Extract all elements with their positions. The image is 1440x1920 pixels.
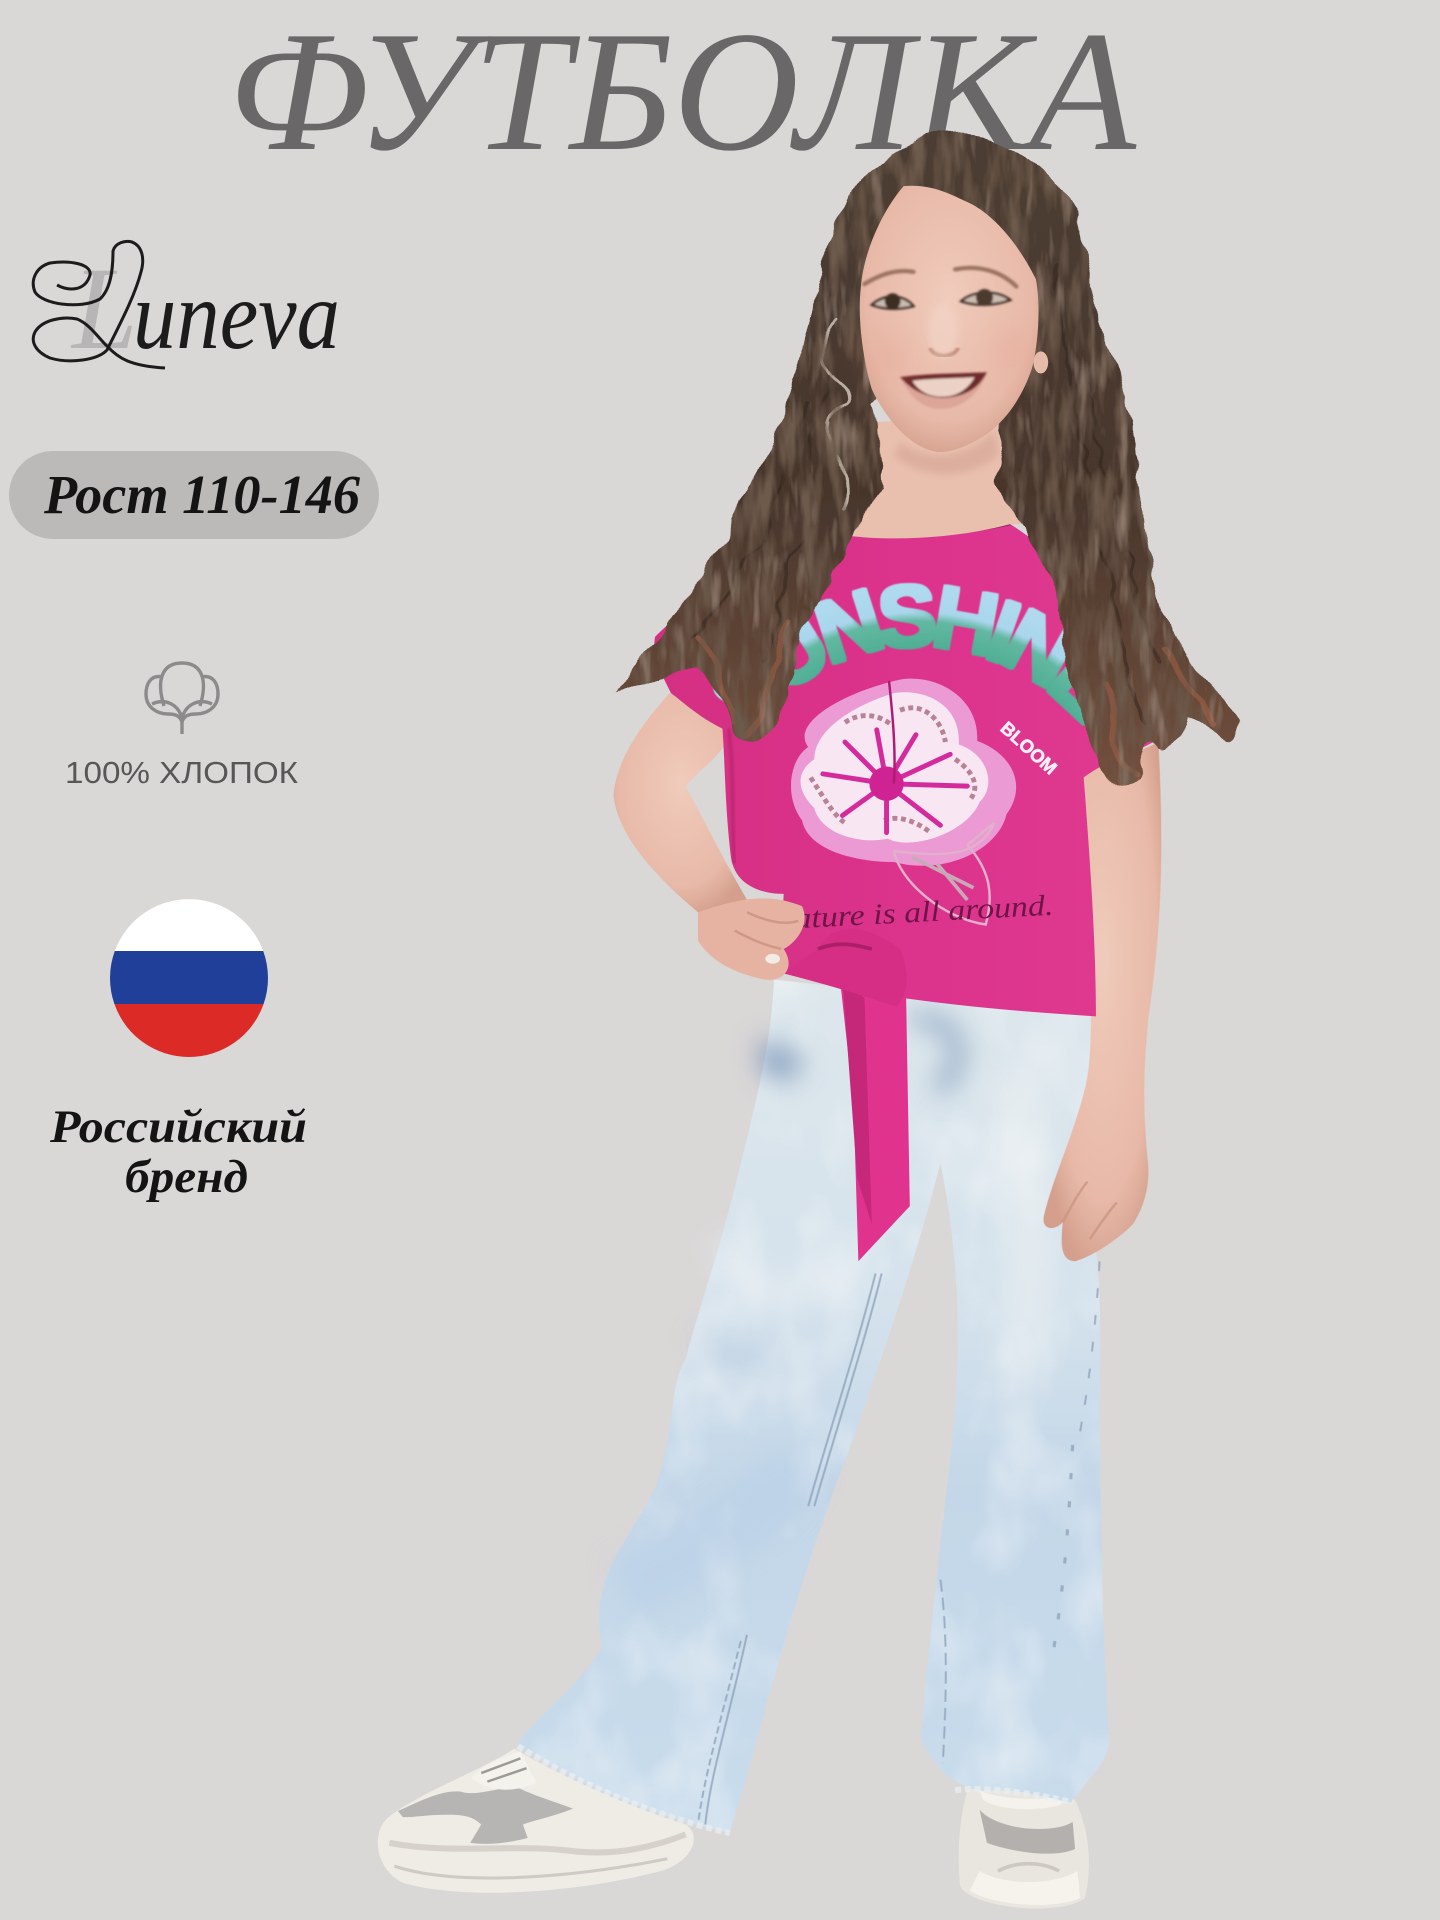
icon: cotton bbox=[146, 663, 218, 734]
brows bbox=[864, 268, 1016, 287]
print: BLOOM: BLOOM bbox=[997, 717, 1061, 778]
mouth bbox=[900, 372, 987, 409]
print: leaf bbox=[894, 823, 994, 924]
print: hibiscus flower bbox=[791, 679, 1016, 866]
brand text bbox=[49, 1101, 307, 1203]
brand text: бренд bbox=[125, 1151, 248, 1203]
neck shadow bbox=[894, 431, 998, 474]
hair strands bbox=[692, 269, 1212, 778]
face bbox=[860, 186, 1048, 474]
jeans bbox=[517, 980, 1109, 1833]
icon: Russian flag bbox=[110, 899, 268, 1057]
left shoe bbox=[378, 1749, 694, 1893]
hair bbox=[617, 132, 1239, 789]
left arm bbox=[613, 692, 749, 912]
height pill bbox=[9, 451, 379, 539]
tie knot and tail bbox=[784, 929, 910, 1261]
print: SUNSHINE arc lettering: SUNSHINE bbox=[712, 582, 1086, 726]
logo: Luneva: uneva bbox=[133, 262, 340, 369]
eyes bbox=[872, 289, 1010, 309]
jeans shading bbox=[624, 1016, 1030, 1592]
cotton label: 100% ХЛОПОК bbox=[65, 755, 298, 790]
girl illustration bbox=[378, 130, 1240, 1908]
hand on hip bbox=[698, 898, 805, 980]
face shape bbox=[860, 186, 1039, 452]
neck bbox=[818, 416, 1029, 538]
nose bbox=[931, 349, 958, 355]
height pill: Рост 110-146 bbox=[43, 464, 360, 525]
brand text: Российский bbox=[49, 1101, 307, 1153]
right arm and hand bbox=[1043, 742, 1161, 1261]
print: slogan: Nature is all around. bbox=[770, 890, 1054, 936]
logo: Luneva: L bbox=[70, 243, 138, 374]
ear bbox=[1033, 351, 1048, 373]
logo: Luneva bbox=[33, 241, 340, 374]
right shoe bbox=[959, 1785, 1089, 1909]
seams bbox=[518, 1261, 1100, 1833]
title: ФУТБОЛКА bbox=[228, 0, 1137, 187]
cheeks bbox=[866, 327, 1032, 377]
t-shirt bbox=[622, 524, 1162, 1262]
